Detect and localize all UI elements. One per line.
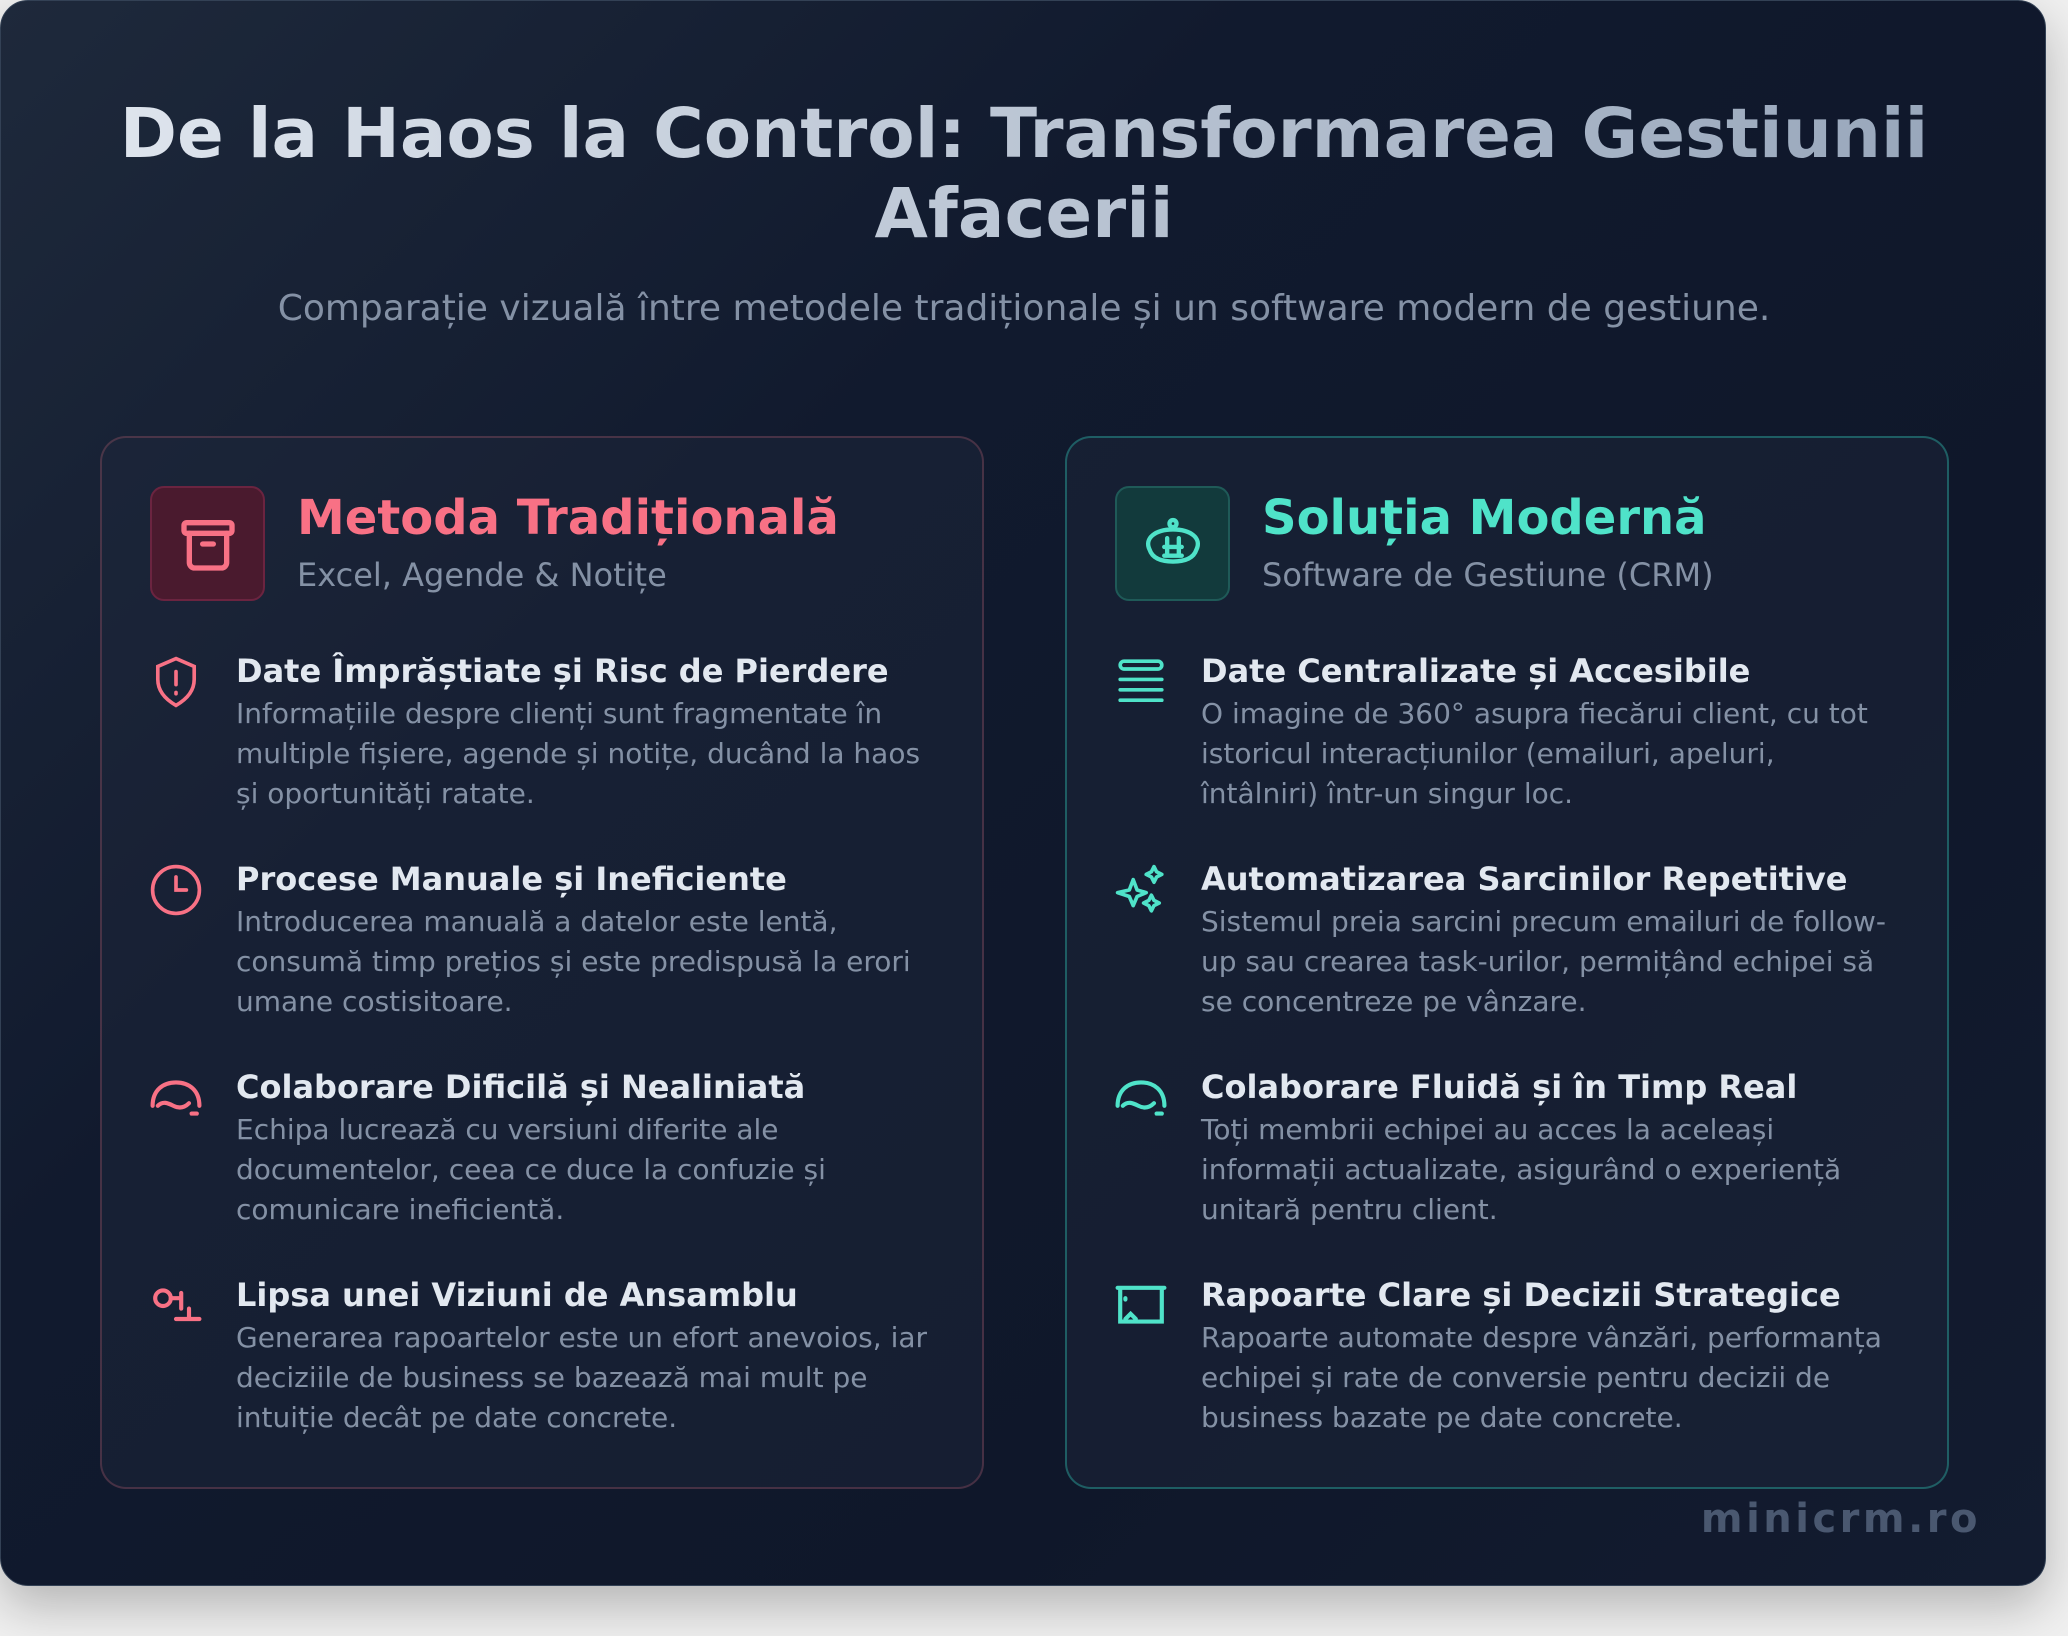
panel: modern: Rapoarte automate despre vânzări, performanța echipei și rate de conversie pentru decizii de business bazate pe date concrete. [1201, 1321, 1882, 1434]
panel: modern: Colaborare Fluidă și în Timp Real [1201, 1068, 1797, 1106]
item 1 [1118, 652, 1868, 810]
panel: traditional: Echipa lucrează cu versiuni diferite ale documentelor, ceea ce duce la confuzie și comunicare ineficientă. [236, 1113, 826, 1226]
panel: modern: Date Centralizate și Accesibile [1201, 652, 1750, 690]
title [1, 94, 2047, 254]
panel: traditional: Generarea rapoartelor este un efort anevoios, iar deciziile de business se bazează mai mult pe intuiție decât pe date concrete. [236, 1321, 927, 1434]
heading: modern: Soluția Modernă [1262, 490, 1707, 546]
subtitle: Comparație vizuală între metodele tradiționale și un software modern de gestiune. [278, 288, 1770, 329]
item 4 [1116, 1276, 1882, 1434]
subheading: Excel, Agende & Notițe [297, 556, 667, 594]
panel: modern: Automatizarea Sarcinilor Repetitive [1201, 860, 1848, 898]
item 4 [153, 1276, 927, 1434]
panel: traditional [100, 436, 984, 1489]
panel: modern: Toți membrii echipei au acces la aceleași informații actualizate, asigurând o experiență unitară pentru client. [1201, 1113, 1841, 1226]
panel: traditional: Colaborare Dificilă și Nealiniată [236, 1068, 805, 1106]
item 3 [150, 1068, 826, 1226]
panel: modern: Rapoarte Clare și Decizii Strategice [1201, 1276, 1841, 1314]
panel: modern: Sistemul preia sarcini precum emailuri de follow-up sau crearea task-urilor, permițând echipei să se concentreze pe vânzare. [1201, 905, 1886, 1018]
panel: traditional: Informațiile despre clienți sunt fragmentate în multiple fișiere, agende și notițe, ducând la haos și oportunități ratate. [236, 697, 920, 810]
icon: crm [1115, 486, 1230, 601]
panel: traditional: Date Împrăștiate și Risc de Pierdere [236, 652, 889, 690]
panel: modern: O imagine de 360° asupra fiecărui client, cu tot istoricul interacțiunilor (emailuri, apeluri, întâlniri) într-un singur loc. [1201, 697, 1868, 810]
panel: traditional: Procese Manuale și Ineficiente [236, 860, 787, 898]
title: De la Haos la Control: Transformarea Gestiunii [120, 94, 1928, 174]
item 3 [1116, 1068, 1841, 1226]
heading: traditional: Metoda Tradițională [297, 490, 839, 546]
item 1 [156, 652, 920, 810]
title: Afacerii [874, 174, 1174, 254]
panel: traditional: Introducerea manuală a datelor este lentă, consumă timp prețios și este predispusă la erori umane costisitoare. [236, 905, 911, 1018]
icon: archive box [150, 486, 265, 601]
panel: modern [1065, 436, 1949, 1489]
item 2 [1116, 860, 1886, 1018]
subheading: Software de Gestiune (CRM) [1262, 556, 1714, 594]
footer brand: minicrm.ro [1701, 1496, 1981, 1542]
item 2 [150, 860, 911, 1018]
panel: traditional: Lipsa unei Viziuni de Ansamblu [236, 1276, 798, 1314]
